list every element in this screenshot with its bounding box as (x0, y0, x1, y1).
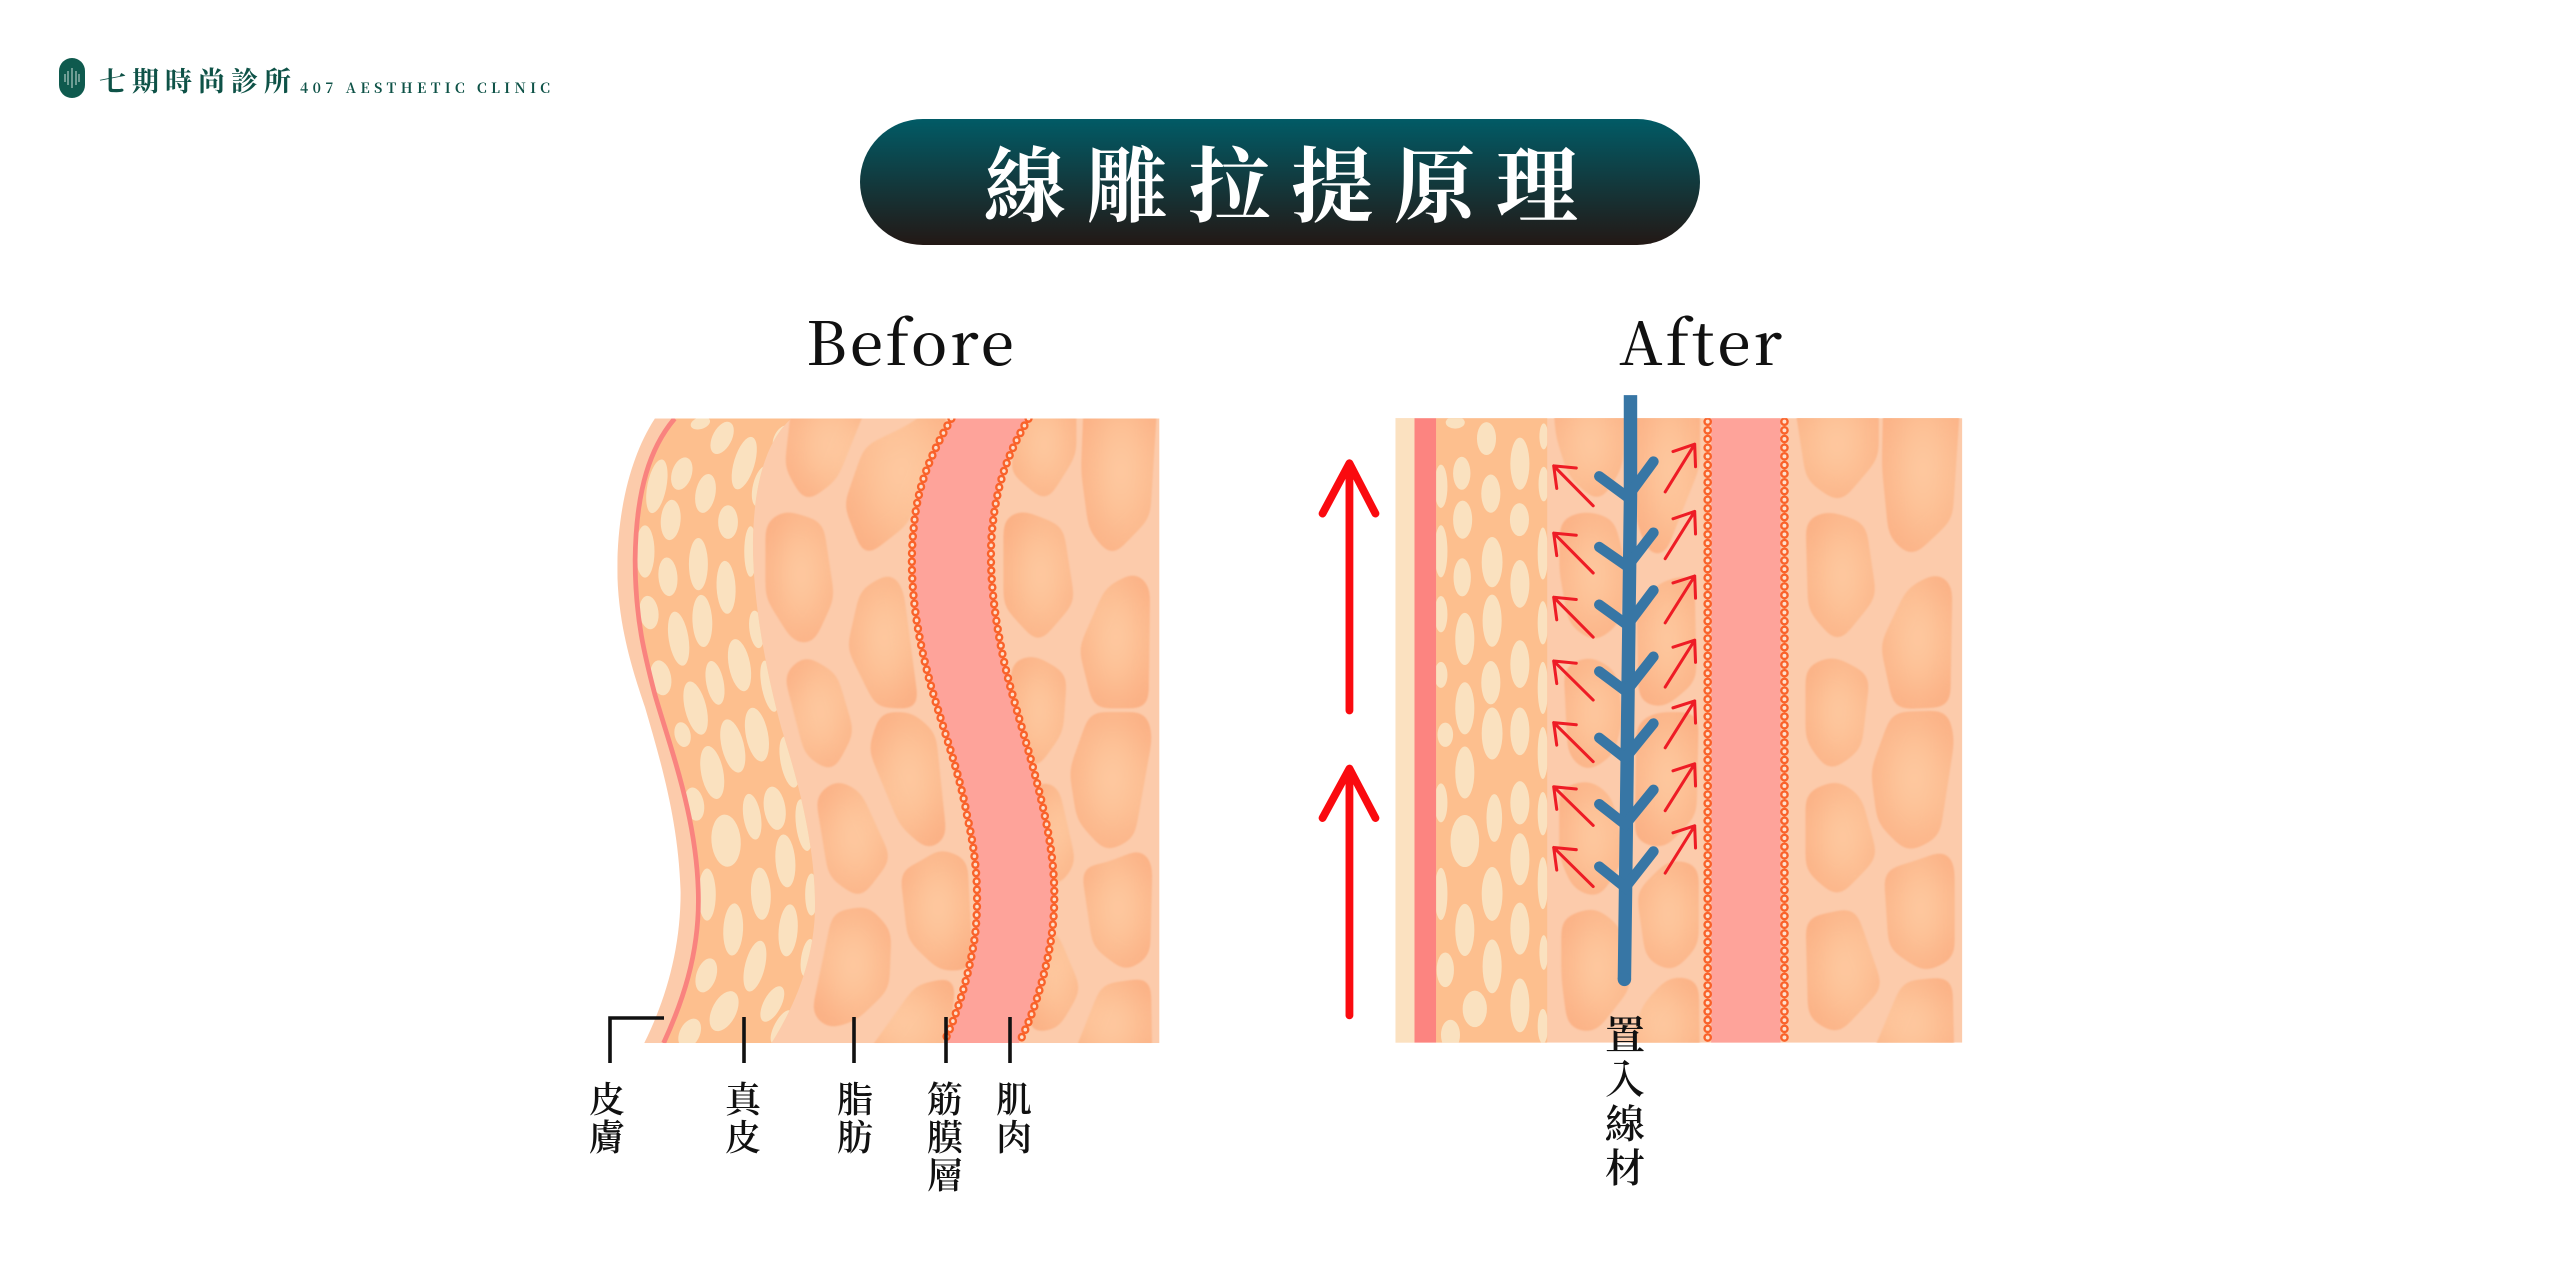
label: inserted thread material (1605, 1004, 1645, 1194)
label: fascia layer (927, 1072, 964, 1199)
label: dermis: 皮 (725, 1110, 761, 1161)
heading: Before: Before (806, 297, 1014, 383)
fascia band (1711, 418, 1781, 1043)
label: muscle (996, 1072, 1032, 1161)
epidermis strip (1414, 418, 1436, 1043)
dermis cells (1434, 416, 1549, 1050)
label: dermis (725, 1072, 764, 1161)
label: inserted thread material: 置 (1605, 1004, 1645, 1061)
label: inserted thread material: 入 (1605, 1048, 1645, 1105)
panel: after skin cross-section (1323, 389, 1962, 1074)
label: fascia layer: 層 (927, 1148, 963, 1199)
label: skin: 皮 (589, 1072, 625, 1123)
inserted barbed thread (1599, 395, 1653, 986)
title pill (860, 119, 1700, 245)
label: fat (837, 1072, 873, 1161)
dermis cells (636, 415, 818, 1053)
dermis layer (1436, 418, 1547, 1043)
icon: logo badge (59, 58, 85, 98)
leader lines (610, 1017, 1010, 1063)
label: skin: 膚 (589, 1110, 625, 1161)
fascia beaded borders (912, 419, 1054, 1043)
label: inserted thread material: 線 (1605, 1093, 1645, 1150)
epidermis line (635, 419, 698, 1043)
label: fat: 肪 (837, 1110, 873, 1161)
label: fat: 脂 (837, 1072, 873, 1123)
fat and muscle cells (1552, 389, 1961, 1074)
fascia beaded borders (1708, 422, 1784, 1043)
label: fascia layer: 膜 (927, 1110, 964, 1161)
panel: before skin cross-section (617, 418, 1160, 1044)
label: muscle: 肉 (996, 1110, 1032, 1161)
label: skin (589, 1072, 625, 1161)
label: dermis: 真 (725, 1072, 764, 1123)
fat and muscle cells (766, 392, 1158, 1073)
big lift arrow: upper (1323, 463, 1375, 710)
fascia band (912, 419, 1054, 1043)
dermis layer (635, 419, 815, 1043)
label: muscle: 肌 (996, 1072, 1032, 1123)
heading: After: After (1619, 297, 1783, 383)
logo Chinese name: 七期時尚診所 (99, 60, 291, 99)
big lift arrow: lower (1323, 769, 1375, 1015)
logo: 407 Aesthetic Clinic (59, 58, 550, 99)
title text: 線雕拉提原理 (984, 122, 1578, 239)
labels: before layers (589, 1017, 1032, 1199)
small red tension arrows (1554, 444, 1696, 887)
logo English name: 407 AESTHETIC CLINIC (300, 78, 550, 98)
outer skin strip (1395, 418, 1414, 1043)
label: inserted thread material: 材 (1605, 1137, 1645, 1194)
label: fascia layer: 筋 (927, 1072, 963, 1123)
